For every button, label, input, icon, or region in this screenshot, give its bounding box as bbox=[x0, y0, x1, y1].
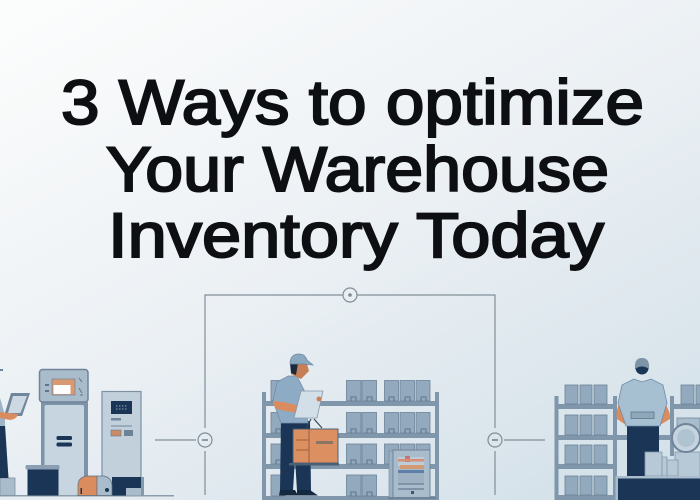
title bbox=[61, 68, 644, 271]
worker hair bbox=[290, 363, 298, 375]
robot cart bbox=[78, 476, 144, 496]
icon: plus node bbox=[343, 288, 357, 302]
orange crate bbox=[289, 419, 339, 466]
table bbox=[616, 476, 700, 500]
worker arms bbox=[617, 397, 670, 425]
control cabinet bbox=[102, 392, 141, 496]
worker cap bbox=[290, 354, 313, 365]
icon: minus node right bbox=[488, 433, 502, 447]
title: 3 Ways to optimize bbox=[61, 68, 644, 138]
worker cap back bbox=[635, 358, 649, 369]
shelf boxes bbox=[271, 380, 430, 496]
worker legs bbox=[280, 421, 311, 491]
worker torso bbox=[273, 376, 308, 423]
boxes on table bbox=[645, 452, 678, 476]
worker shirt bbox=[618, 379, 667, 426]
floor line bbox=[0, 495, 174, 496]
waste bin bbox=[26, 465, 60, 496]
worker with tablet bbox=[0, 369, 30, 496]
left scene: equipment bbox=[0, 369, 174, 496]
box labels bbox=[276, 397, 426, 496]
right scene: worker from behind bbox=[554, 358, 700, 500]
worker head back bbox=[636, 362, 648, 374]
title: Inventory Today bbox=[108, 201, 605, 271]
icon: minus node left bbox=[198, 433, 212, 447]
shelving bbox=[262, 392, 439, 500]
worker boots bbox=[279, 490, 318, 496]
left shelving bbox=[554, 396, 617, 500]
left shelving boxes bbox=[565, 385, 607, 495]
right shelving bbox=[615, 385, 700, 456]
connector diagram bbox=[155, 288, 545, 495]
washing machine bbox=[672, 424, 700, 477]
worker head bbox=[291, 364, 309, 379]
title: Your Warehouse bbox=[106, 135, 609, 205]
worker legs back bbox=[627, 425, 659, 476]
hand bbox=[316, 396, 322, 402]
middle scene: worker at shelving bbox=[262, 354, 439, 500]
stock machine bbox=[388, 450, 436, 499]
clipboard bbox=[294, 391, 323, 418]
worker arm bbox=[273, 401, 301, 413]
back pocket bbox=[631, 412, 654, 418]
kiosk machine bbox=[40, 370, 88, 495]
